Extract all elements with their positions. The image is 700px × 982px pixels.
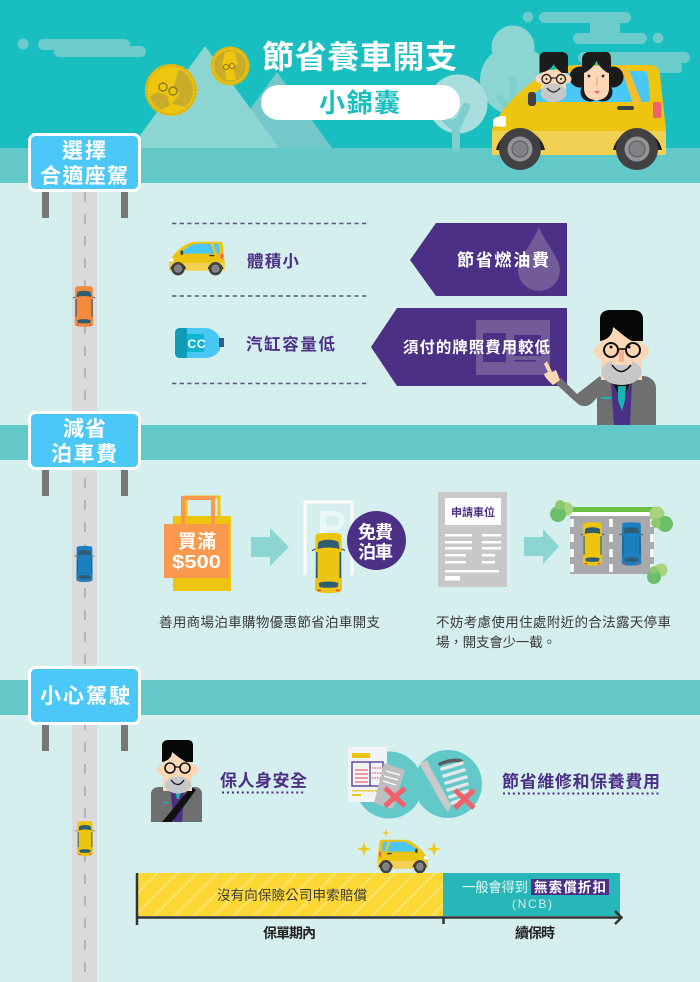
icon: parking application form [438,492,507,587]
timeline chart [137,873,622,941]
label: ncb discount: (NCB) [512,897,552,911]
subtitle pill: 小錦囊 [319,88,400,118]
icon: parking application form: 申請車位 [451,505,495,519]
icon: small car [169,242,225,275]
road car: blue [75,546,94,582]
car mirror [528,92,536,106]
road sign: choose car [30,134,140,218]
road sign: choose car: 合適座駕 [40,164,128,188]
badge: free parking [347,511,406,570]
big car with passengers [492,52,666,170]
badge: free parking: 免費 [358,522,393,542]
trees [428,26,550,148]
section band: parking [0,425,700,460]
icon: engine cc bottle: CC [188,337,206,351]
title: 節省養車開支 [262,39,457,75]
label: ncb discount: 無索償折扣 [534,879,606,895]
label: ncb discount [462,879,609,911]
man passenger [536,52,572,102]
label: small size: 體積小 [247,252,300,271]
woman passenger [570,52,624,102]
icon: licence document [476,320,550,375]
label: within policy period: 保單期內 [263,925,316,941]
mountains [131,46,332,148]
dashed dividers [172,224,369,384]
caption: open-air car park: 場，開支會少一截。 [436,635,556,650]
icon: shopping bag $500: 買滿 [178,531,216,552]
road sign: careful driving [30,668,140,751]
icon: shiny car [356,829,442,873]
icon: insurance documents crossed out [348,747,422,818]
road car: orange [73,286,95,327]
arrow panel: save fuel: 節省燃油費 [457,250,549,270]
icon: coins [145,46,250,116]
icon: free parking bay [305,502,352,593]
road sign: parking: 泊車費 [51,443,117,466]
icon: fuel drop [518,227,560,291]
cloud: right [523,12,690,73]
label: ncb discount: 一般會得到 [462,879,528,895]
subtitle pill [261,85,460,120]
icon: engine cc bottle [175,328,224,358]
label: personal safety: 保人身安全 [220,770,307,790]
icon: open-air car park [550,500,673,584]
icon: free parking bay: P [317,502,346,551]
cloud: left [18,38,146,57]
man wearing seatbelt [151,740,202,822]
caption: open-air car park: 不妨考慮使用住處附近的合法露天停車 [436,614,671,630]
arrow: form to car park [524,529,559,564]
icon: shopping bag $500 [164,497,231,591]
arrow: shopping to parking [251,528,289,566]
label: no claims: 沒有向保險公司申索賠償 [217,887,368,903]
badge: free parking: 泊車 [358,542,393,562]
road car: yellow [75,821,95,856]
icon: repair tools crossed out [414,750,482,818]
section band: driving [0,680,700,715]
arrow panel: lower licence fee [371,308,567,386]
arrow panel: save fuel [410,223,567,296]
caption: mall parking: 善用商場泊車購物優惠節省泊車開支 [159,614,380,630]
label: save repair cost: 節省維修和保養費用 [502,772,660,792]
label: on renewal: 續保時 [515,925,555,941]
caption: open-air car park [436,614,671,650]
road sign: parking: 減省 [63,417,106,441]
road sign: choose car: 選擇 [62,140,106,163]
presenter man [544,310,656,425]
road [72,192,97,982]
arrow panel: lower licence fee: 須付的牌照費用較低 [403,338,550,356]
icon: shopping bag $500: $500 [172,552,221,572]
road sign: careful driving: 小心駕駛 [40,685,130,708]
road sign: parking [30,412,140,496]
label: low engine capacity: 汽缸容量低 [246,334,336,354]
